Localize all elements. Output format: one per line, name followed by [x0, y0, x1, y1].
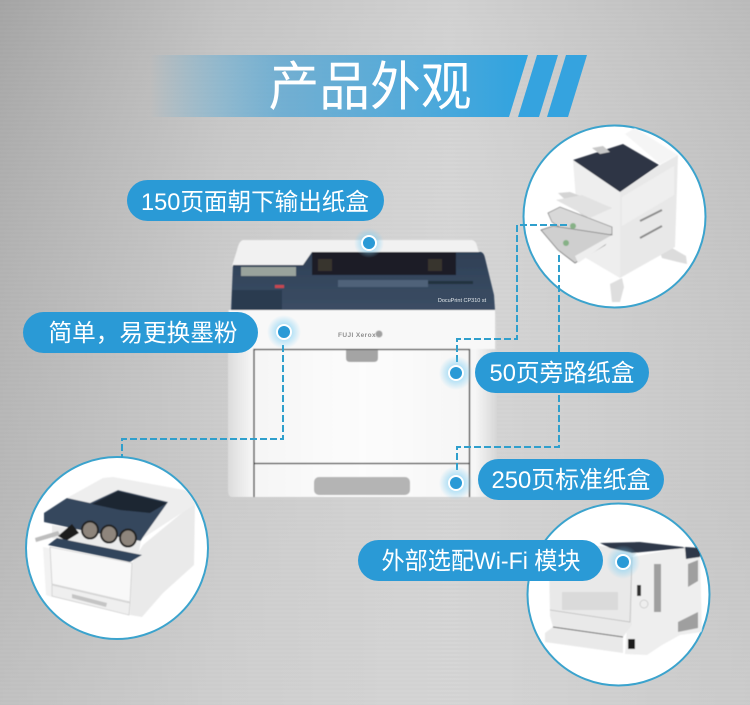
hotspot: bypass tray	[439, 356, 473, 390]
detail circle: rear	[528, 504, 710, 686]
main printer	[228, 240, 497, 497]
printer top cover	[232, 240, 483, 266]
label: 250 page standard tray	[478, 459, 664, 500]
output slot	[312, 252, 456, 275]
upper open tray	[547, 206, 613, 235]
paper door	[562, 592, 618, 610]
detail circle: toner	[26, 457, 208, 639]
title banner	[150, 55, 587, 117]
printer body	[228, 310, 497, 497]
label: 250 page standard tray: 250页标准纸盒	[492, 467, 650, 494]
title: 产品外观	[268, 58, 472, 117]
ports	[637, 585, 641, 596]
display	[241, 267, 296, 276]
toner panel	[52, 525, 141, 556]
label: easy toner replacement: 简单，易更换墨粉	[48, 320, 238, 347]
tower left face	[573, 160, 620, 278]
printer top	[67, 477, 197, 540]
stand	[610, 278, 624, 302]
door handle	[346, 350, 378, 362]
toner slots	[82, 522, 98, 538]
rear body back	[545, 546, 640, 653]
label: 150 page output tray	[127, 180, 384, 221]
detail circle: paper trays	[524, 126, 706, 308]
output tray	[92, 491, 167, 513]
logo: FUJI Xerox	[338, 332, 376, 339]
open door strip	[48, 538, 142, 562]
label: external wifi module: 外部选配Wi-Fi 模块	[382, 548, 580, 575]
multipurpose tray sheets	[558, 192, 588, 218]
label: 50 page bypass tray	[475, 352, 649, 393]
paper tray handle	[72, 594, 107, 607]
power socket	[628, 639, 635, 649]
hotspot: standard tray	[439, 466, 473, 500]
model label: DocuPrint CP310 st	[438, 298, 487, 304]
dark top	[600, 542, 685, 553]
control and output dark section	[231, 252, 495, 310]
front door outline	[254, 350, 470, 497]
hotspot: wifi module	[606, 545, 640, 579]
rear body side	[625, 547, 702, 655]
printer front	[44, 548, 52, 596]
hotspot: output tray	[354, 228, 384, 258]
top lid	[573, 144, 659, 192]
hotspot: toner	[267, 315, 301, 349]
lower open tray	[541, 226, 612, 263]
toner cartridge	[58, 524, 79, 541]
paper tray handle	[314, 477, 410, 495]
label: external wifi module	[358, 540, 603, 581]
top right cover	[625, 128, 678, 164]
tower right face	[620, 155, 678, 278]
label: 150 page output tray: 150页面朝下输出纸盒	[141, 189, 369, 216]
dark control band	[44, 490, 168, 543]
tray slots	[640, 210, 662, 238]
label: 50 page bypass tray: 50页旁路纸盒	[490, 360, 634, 387]
label: easy toner replacement	[23, 312, 258, 353]
dashed connector lines	[122, 225, 567, 470]
vents	[654, 564, 661, 612]
printer side	[130, 502, 195, 617]
